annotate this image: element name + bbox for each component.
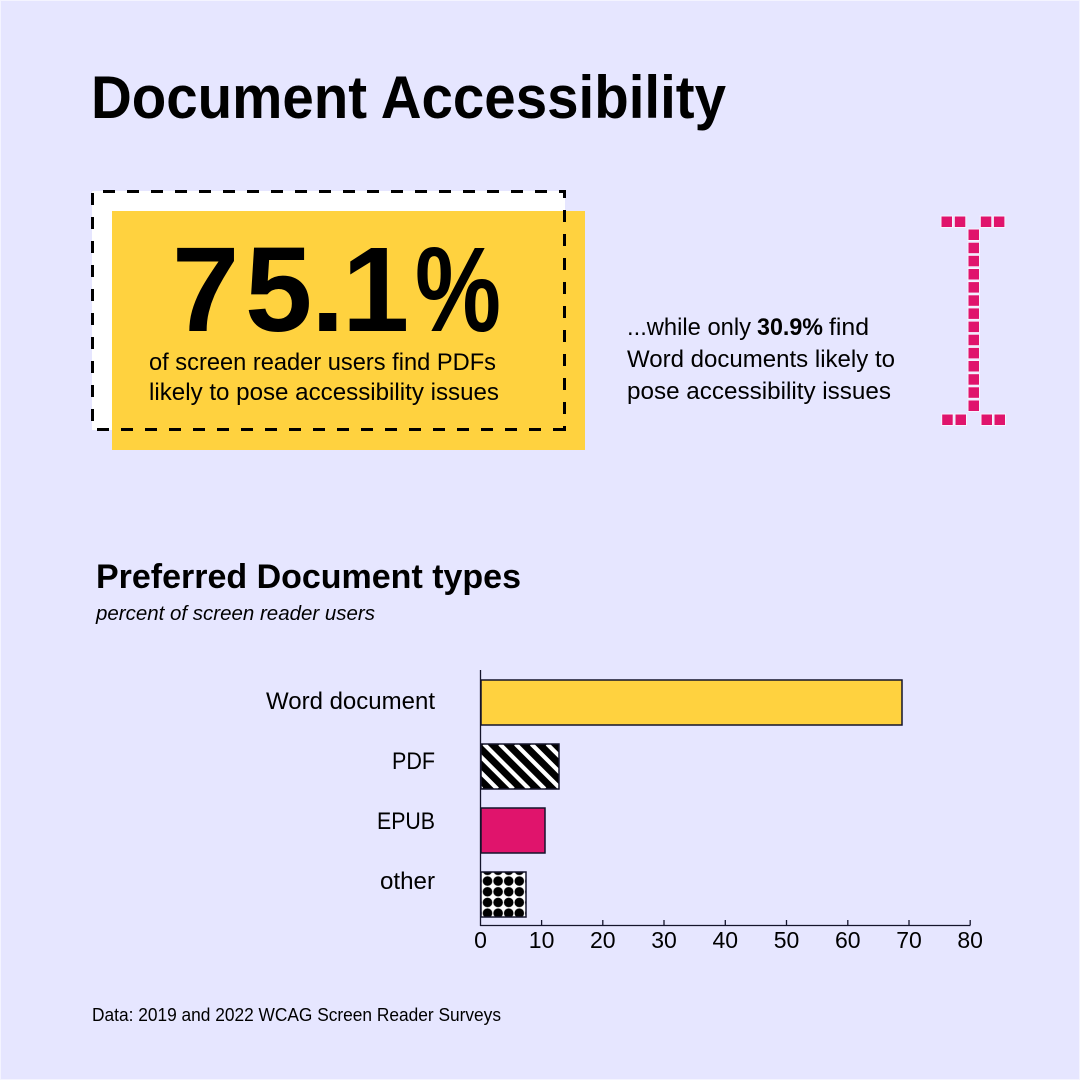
axis tick labels: 50	[774, 927, 799, 953]
text block: Word statistic: ...while only	[627, 314, 751, 341]
axis tick labels: 70	[896, 927, 922, 953]
data source footer: Data: 2019 and 2022 WCAG Screen Reader Surveys	[92, 1005, 501, 1025]
big number: 75.1	[172, 221, 409, 357]
title: Document Accessibility	[91, 64, 727, 131]
axis tick labels: 10	[529, 927, 554, 953]
category labels: PDF	[392, 748, 435, 775]
axis tick labels: 40	[713, 927, 738, 953]
axis tick labels	[474, 927, 983, 953]
icon: pixel text cursor	[941, 216, 1006, 426]
dashed outline	[91, 191, 566, 431]
PDF statistic caption: likely to pose accessibility issues	[149, 379, 499, 406]
axes and ticks	[480, 670, 970, 926]
PDF statistic caption: of screen reader users find PDFs	[149, 349, 496, 376]
text block: Word statistic: find	[829, 314, 869, 341]
text block: Word statistic: pose accessibility issues	[627, 378, 891, 405]
category labels	[266, 688, 435, 895]
PDF statistic caption	[149, 349, 499, 406]
category labels: other	[380, 868, 435, 895]
white offset card	[92, 191, 565, 430]
text block: Word statistic	[627, 314, 895, 405]
chart subtitle: percent of screen reader users	[95, 603, 375, 625]
panel: PDF statistic card	[91, 191, 585, 450]
big number: %	[415, 221, 501, 357]
bar: EPUB	[481, 808, 545, 853]
axis tick labels: 80	[957, 927, 983, 953]
category labels: EPUB	[377, 808, 435, 835]
chart heading: Preferred Document types	[96, 558, 521, 596]
text block: Word statistic: 30.9%	[757, 314, 823, 341]
axis tick labels: 60	[835, 927, 861, 953]
axis tick labels: 20	[590, 927, 616, 953]
text block: Word statistic: Word documents likely to	[627, 346, 895, 373]
axis tick labels: 30	[651, 927, 677, 953]
bar: other	[481, 872, 526, 917]
bar: Word document	[481, 680, 902, 725]
bar chart: preferred document types	[266, 670, 983, 953]
bar: PDF	[481, 743, 560, 790]
yellow card	[112, 211, 585, 450]
category labels: Word document	[266, 688, 435, 715]
axis tick labels: 0	[474, 927, 487, 953]
